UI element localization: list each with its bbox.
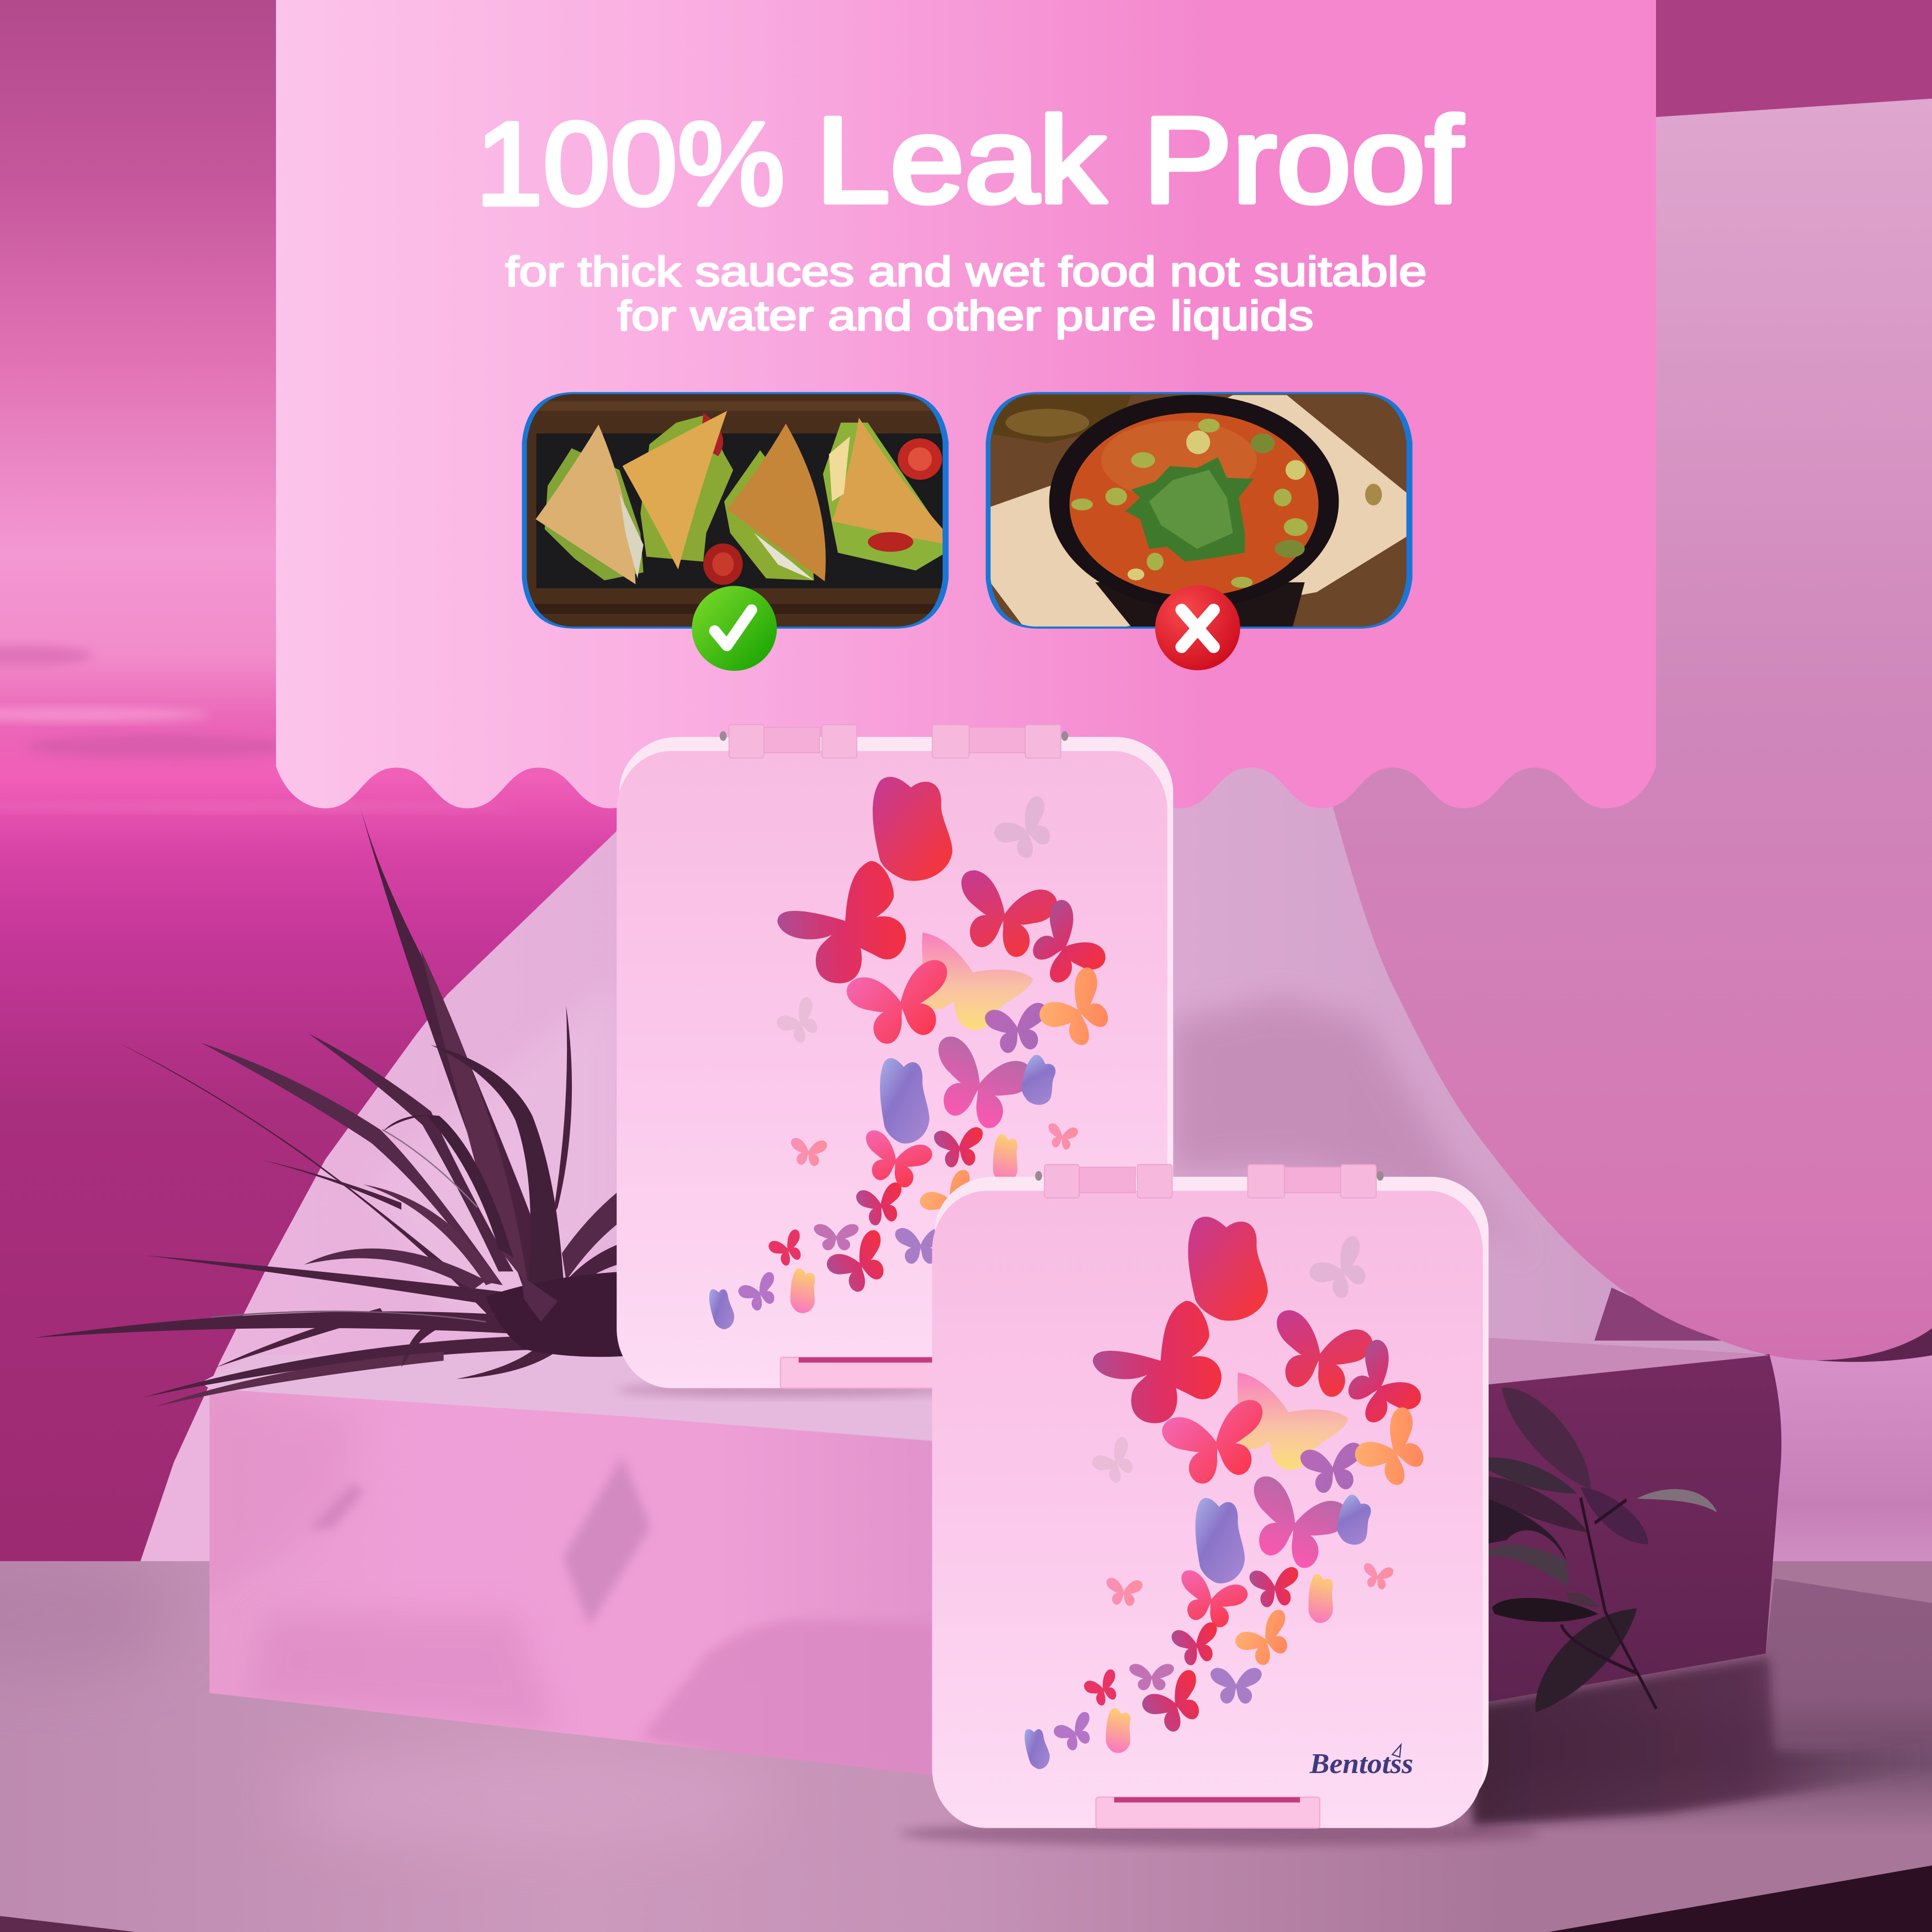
title bbox=[476, 92, 1463, 230]
spiky plant bbox=[34, 795, 625, 1406]
subtitle: for water and other pure liquids bbox=[617, 293, 1313, 339]
right plant bbox=[1484, 1388, 1717, 1712]
photo: soup bowl bbox=[985, 392, 1415, 630]
brand logo: Bentotss bbox=[1309, 1748, 1413, 1780]
subtitle bbox=[505, 248, 1427, 339]
pink header panel with scalloped edge bbox=[276, 0, 1656, 808]
dark band below round shape bbox=[1816, 1326, 1932, 1362]
top right background band bbox=[1656, 0, 1932, 123]
left stone block bbox=[197, 1349, 961, 1787]
photo: sandwiches bbox=[521, 392, 952, 630]
icon: red cross bbox=[1155, 585, 1240, 670]
rock mountain bbox=[139, 739, 1774, 1577]
back wall and large round pink shape bbox=[1333, 99, 1932, 1360]
table floor bbox=[0, 1552, 1932, 1932]
subtitle: for thick sauces and wet food not suitable bbox=[505, 248, 1427, 295]
right stone block bbox=[1472, 1337, 1781, 1703]
lunchbox: back bbox=[617, 725, 1173, 1388]
lunchbox: front bbox=[932, 1165, 1489, 1828]
icon: green check bbox=[692, 586, 777, 671]
title: Leak Proof bbox=[816, 92, 1463, 228]
lower right wall bbox=[1769, 1353, 1932, 1608]
title: 100% bbox=[476, 98, 785, 230]
shadow under front lunchbox bbox=[899, 1821, 1540, 1846]
clouds on the horizon bbox=[0, 646, 518, 812]
